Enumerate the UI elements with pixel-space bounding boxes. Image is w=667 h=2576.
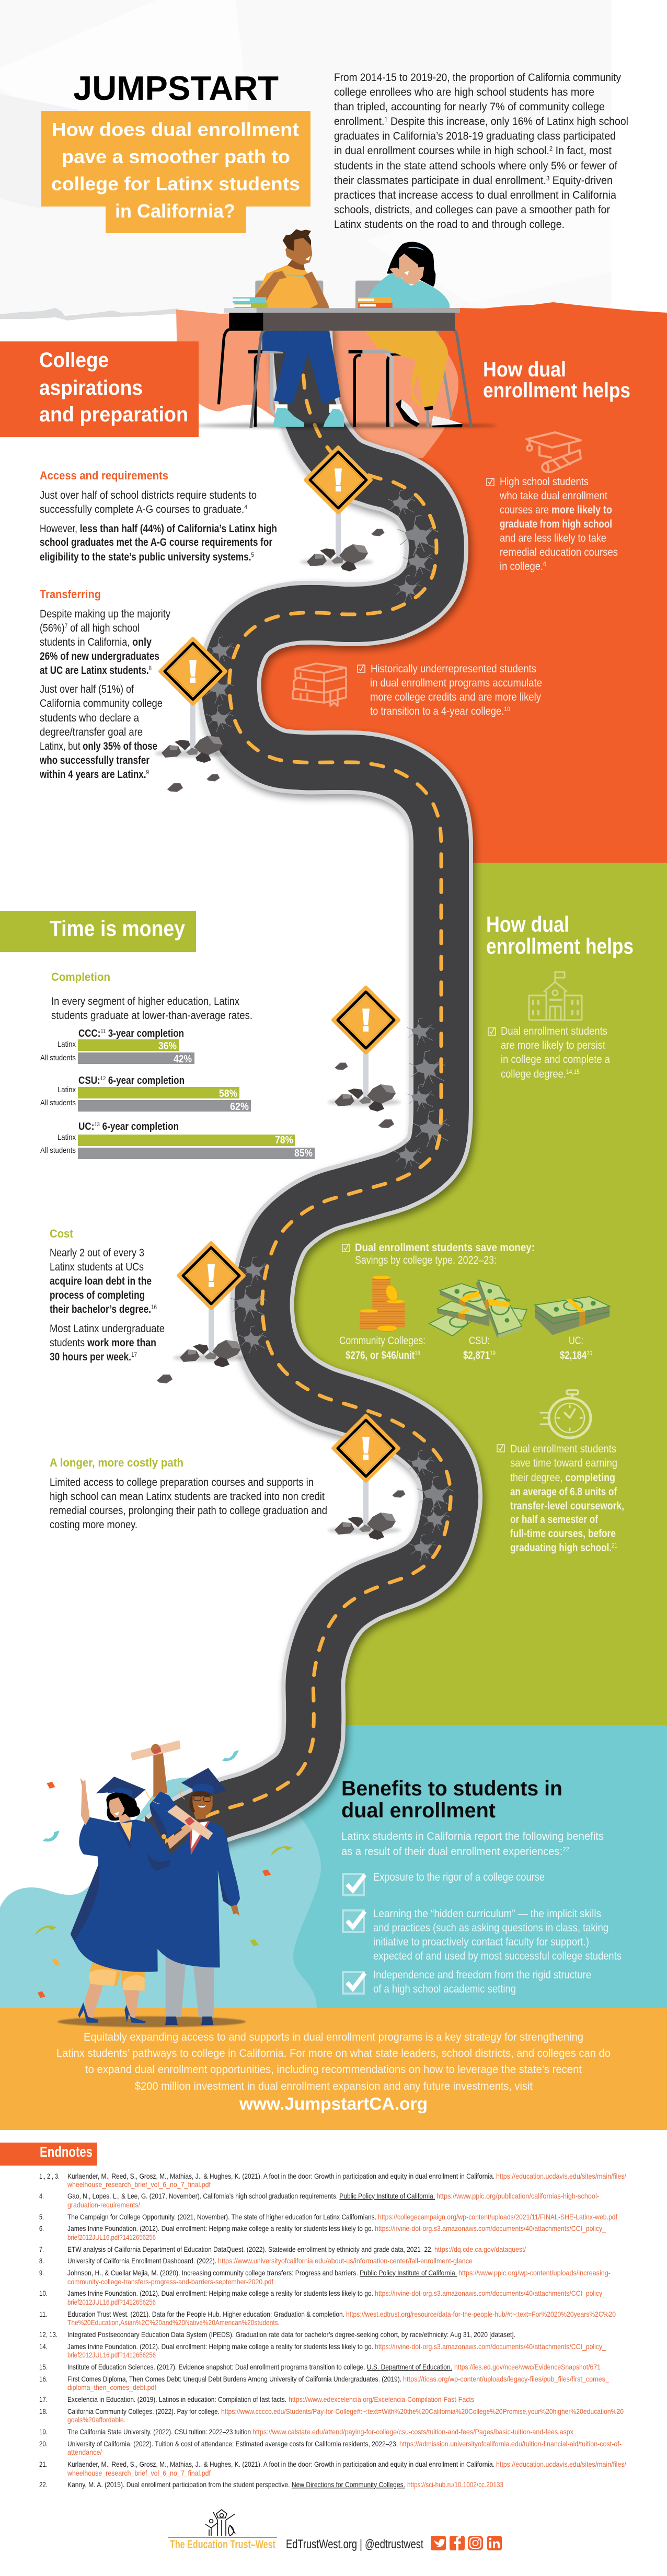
hazard sign 5 with rocks: [328, 1415, 401, 1540]
bars: UC: All students: [40, 1146, 76, 1155]
savings figures: $2,184: [560, 1349, 587, 1361]
text block: a longer, more costly path: high school can mean Latinx students are tracked into non credit: [50, 1491, 325, 1503]
bars: UC: 85%: [294, 1148, 313, 1159]
logo: The Education Trust-West: [168, 2510, 277, 2551]
text block: a longer, more costly path: A longer, more costly path: [50, 1456, 183, 1469]
section label: time is money: Time is money: [50, 916, 186, 941]
bars: CSU: All students: [40, 1098, 76, 1107]
section label: college aspirations and preparation: College: [39, 349, 109, 372]
endnotes list: brief2012JUL16.pdf?1412656256: [67, 2298, 156, 2306]
endnotes list: 17.: [39, 2395, 48, 2403]
text block: cost: students work more than: [50, 1337, 156, 1349]
text block: completion: [51, 970, 252, 1022]
bars: UC: 13: [94, 1121, 100, 1128]
bar chart: completion rates: [40, 1028, 315, 1159]
closing call to action: $200 million investment in dual enrollment expansion and any future investments, visit: [135, 2080, 533, 2092]
text block: completion: Completion: [51, 970, 110, 983]
endnotes list: https://www.universityofcalifornia.edu/about-us/information-center/fall-enrollment-glance: [218, 2257, 473, 2265]
intro paragraph: From 2014-15 to 2019-20, the proportion of California community: [334, 72, 621, 84]
intro paragraph: 1: [384, 116, 388, 123]
checklist: historically underrepresented students: Historically underrepresented students: [371, 663, 536, 675]
closing call to action: [56, 2031, 611, 2113]
benefit 3: [343, 1969, 591, 1995]
benefit 2: [343, 1908, 622, 1962]
benefit 3: of a high school academic setting: [373, 1983, 516, 1995]
text block: a longer, more costly path: [50, 1456, 327, 1531]
checklist: save money: Savings by college type, 2022–23:: [355, 1254, 497, 1266]
man raised arm and diploma: [131, 1740, 188, 1839]
bars: CCC: 36%: [158, 1040, 177, 1052]
endnotes list: 22.: [39, 2480, 48, 2489]
bars: CCC: [40, 1028, 194, 1065]
intro paragraph: college enrollees who are high school students has more: [334, 86, 594, 98]
endnotes list: graduation-requirements/: [67, 2201, 140, 2209]
benefit 2: initiative to proactively contact faculty for support.): [373, 1936, 589, 1948]
endnotes list: 14.: [39, 2342, 48, 2351]
endnotes list: https://ticas.org/wp-content/uploads/legacy-files/pub_files/first_comes_: [403, 2375, 609, 2383]
endnotes list: 20.: [39, 2440, 48, 2448]
text block: completion: In every segment of higher education, Latinx: [51, 995, 239, 1007]
endnotes list: https://irvine-dot-org.s3.amazonaws.com/documents/40/attachments/CCI_policy_: [375, 2289, 606, 2297]
bars: CSU: 58%: [219, 1088, 237, 1100]
checklist: save time: Dual enrollment students: [510, 1443, 616, 1455]
endnotes list: Excelencia in Education. (2019). Latinos in education: Compilation of fast facts.: [67, 2395, 286, 2403]
hazard sign 2 with rocks: [155, 638, 228, 763]
text block: transferring: degree/transfer goal are: [40, 726, 143, 738]
text block: transferring: of all high school: [67, 622, 140, 634]
checklist: save time: save time toward earning: [510, 1457, 617, 1469]
heading: how dual enrollment helps (orange): enrollment helps: [483, 379, 630, 402]
intro paragraph: Despite this increase, only 16% of Latinx high school: [388, 116, 628, 128]
endnotes list: 12, 13.: [39, 2330, 58, 2339]
endnotes list: wheelhouse_research_brief_vol_6_no_7_final.pdf: [67, 2180, 211, 2189]
endnotes list: brief2012JUL16.pdf?1412656256: [67, 2351, 156, 2359]
endnotes list: ETW analysis of California Department of Education DataQuest. (2022). Statewide enrollment by ethnicity and grade data, 2021–22.: [67, 2245, 433, 2253]
text block: access and requirements: 4: [244, 503, 247, 511]
icon: graduation cap and diploma: [526, 432, 581, 472]
endnotes list: 10.: [39, 2289, 48, 2297]
logo: The Education Trust-West: The Education Trust–West: [170, 2538, 275, 2551]
text block: a longer, more costly path: remedial courses, prolonging their path to college graduation and: [50, 1505, 327, 1517]
endnotes list: California Community Colleges. (2022). Pay for college.: [67, 2407, 220, 2415]
checklist: save time: full-time courses, before: [510, 1528, 616, 1540]
text block: access and requirements: successfully complete A-G courses to graduate.: [40, 503, 272, 516]
desk: [218, 308, 472, 428]
benefit 1: [343, 1871, 545, 1895]
checklist: historically underrepresented students: in dual enrollment programs accumulate: [370, 677, 542, 689]
panel background: teal benefits section: [220, 1723, 667, 2009]
checklist: high school students: remedial education courses: [500, 546, 618, 558]
endnotes list: 21.: [39, 2460, 48, 2468]
heading: how dual enrollment helps (green): enrollment helps: [486, 934, 634, 958]
text block: cost: Latinx students at UCs: [50, 1261, 144, 1273]
heading: benefits to students: Benefits to students in: [341, 1777, 562, 1800]
icon: stack of books: [293, 663, 346, 706]
text block: cost: Nearly 2 out of every 3: [50, 1247, 144, 1259]
text block: transferring: (56%): [40, 622, 69, 634]
panel background: orange right section: [229, 302, 667, 863]
endnotes list: https://west.edtrust.org/resource/data-for-the-people-hub/#:~:text=For%2020%20years%2C%20: [346, 2310, 616, 2318]
text block: transferring: within 4 years are Latinx.: [39, 769, 146, 781]
checklist: save time: or half a semester of: [510, 1514, 599, 1526]
endnotes label: [0, 2143, 97, 2166]
intro paragraph: Equity-driven: [549, 175, 613, 187]
text block: benefits intro: 22: [562, 1846, 569, 1853]
text block: transferring: Transferring: [40, 588, 101, 601]
bars: CSU: 12: [100, 1075, 106, 1082]
woman arm and diploma: [162, 1805, 213, 1849]
man gown: [157, 1821, 240, 1967]
checklist: high school students: [487, 476, 618, 573]
text block: cost: Most Latinx undergraduate: [50, 1323, 165, 1335]
text block: transferring: Despite making up the majority: [40, 608, 170, 620]
checklist: persist and complete: are more likely to persist: [501, 1039, 605, 1051]
endnotes list: 16.: [39, 2375, 48, 2383]
background: crumpled paper header: [0, 0, 667, 322]
text block: cost: Cost: [50, 1227, 74, 1240]
heading: benefits to students: dual enrollment: [341, 1799, 496, 1822]
endnotes list: https://admission.universityofcalifornia.edu/tuition-financial-aid/tuition-cost-of-: [399, 2440, 622, 2448]
intro paragraph: practices that increase access to dual enrollment in California: [334, 189, 616, 201]
heading: how dual enrollment helps (green): [486, 912, 634, 958]
checklist: persist and complete: [488, 1025, 610, 1080]
text block: transferring: students who declare a: [40, 712, 139, 724]
endnotes list: https://dq.cde.ca.gov/dataquest/: [434, 2245, 526, 2253]
checklist: save money: Dual enrollment students save money:: [355, 1242, 535, 1254]
savings figures: $2,871: [463, 1349, 490, 1361]
endnotes list: https://collegecampaign.org/wp-content/uploads/2021/11/FINAL-SHE-Latinx-web.pdf: [378, 2213, 617, 2221]
savings figures: UC:: [569, 1335, 583, 1347]
endnotes list: 4.: [39, 2192, 44, 2200]
savings figures: 18: [415, 1349, 420, 1357]
savings figures: 19: [490, 1349, 496, 1357]
text block: benefits intro: as a result of their dual enrollment experiences:: [341, 1846, 572, 1858]
icon: school building: [529, 972, 582, 1020]
icon: stick figures with grad cap: [205, 2510, 235, 2536]
intro paragraph: [334, 72, 628, 231]
title: JUMPSTART: [73, 69, 279, 107]
icon: cash stack: [535, 1297, 610, 1335]
endnotes label: Endnotes: [40, 2144, 93, 2160]
savings figures: Community Colleges:: [339, 1335, 426, 1347]
intro paragraph: Latinx students on the road to and through college.: [334, 219, 565, 231]
section label: college aspirations and preparation: [0, 341, 199, 437]
bars: CCC: 42%: [174, 1054, 192, 1065]
text block: access and requirements: However, less than half (44%) of California’s Latinx high: [40, 523, 277, 535]
endnotes list: The California State University. (2022). CSU tuition: 2022–23 tuition: [67, 2428, 251, 2436]
savings figures: $276, or $46/unit: [346, 1349, 415, 1361]
endnotes list: https://www.calstate.edu/attend/paying-for-college/csu-costs/tuition-and-fees/Pages/basic-tuition-and-fees.aspx: [252, 2428, 573, 2436]
subtitle callout box: How does dual enrollment: [52, 119, 299, 140]
checklist: historically underrepresented students: [358, 663, 542, 717]
subtitle callout box: in California?: [115, 200, 235, 222]
endnotes list: 1., 2., 3.: [39, 2172, 60, 2180]
endnotes list: Integrated Postsecondary Education Data System (IPEDS). Graduation rate data for bachelor’s degree-seeking cohort, by race/ethnicity: Aug 31, 2020 [dataset].: [67, 2330, 515, 2339]
benefit 2: expected of and used by most successful college students: [373, 1950, 622, 1962]
icon: coin stacks: [360, 1276, 405, 1332]
savings figures: [339, 1335, 592, 1361]
text block: access and requirements: Just over half of school districts require students to: [40, 489, 257, 501]
floor shadow: [58, 2016, 246, 2027]
checklist: historically underrepresented students: to transition to a 4-year college.: [370, 705, 523, 717]
endnotes list: community-college-transfers-progress-and-barriers-september-2020.pdf: [67, 2277, 273, 2286]
floor shadow under desk: [193, 423, 497, 428]
text block: cost: 30 hours per week.: [50, 1351, 131, 1363]
endnotes list: First Comes Diploma, Then Comes Debt: Unequal Debt Burdens Among University of California Undergraduates. (2019).: [67, 2375, 401, 2383]
hazard sign 4 with rocks: [173, 1243, 246, 1367]
endnotes list: [39, 2172, 626, 2489]
checklist: save time: an average of 6.8 units of: [510, 1486, 617, 1498]
closing call to action: www.JumpstartCA.org: [239, 2094, 428, 2113]
bars: UC: [40, 1121, 315, 1159]
panel background: green right section: [262, 863, 667, 1725]
endnotes list: Gao, N., Lopes, L., & Lee, G. (2017, November). California’s high school graduation requirements. Public Policy Institute of California.: [67, 2192, 435, 2200]
checklist: save time: their degree, completing: [510, 1472, 615, 1484]
woman arm and head: [80, 1777, 160, 1825]
endnotes list: 6.: [39, 2224, 44, 2232]
contact line: EdTrustWest.org | @edtrustwest: [286, 2537, 423, 2551]
section label: time is money: [0, 911, 196, 952]
endnotes list: Johnson, H., & Cuellar Mejia, M. (2020). Increasing community college transfers: Progress and barriers. Public Policy Institute of California.: [67, 2269, 457, 2277]
intro paragraph: 2: [549, 145, 553, 152]
text block: access and requirements: 5: [251, 551, 254, 558]
text block: cost: 17: [131, 1351, 137, 1358]
text block: benefits intro: [341, 1830, 604, 1858]
bars: CSU: CSU:: [78, 1075, 104, 1086]
text block: transferring: 7: [65, 622, 68, 629]
bars: CCC: All students: [40, 1054, 76, 1062]
text block: access and requirements: Access and requirements: [40, 469, 168, 482]
endnotes list: James Irvine Foundation. (2012). Dual enrollment: Helping make college a reality for students less likely to go.: [67, 2224, 373, 2232]
book stacks: [233, 297, 393, 308]
endnotes list: 9.: [39, 2269, 44, 2277]
endnotes list: https://irvine-dot-org.s3.amazonaws.com/documents/40/attachments/CCI_policy_: [375, 2224, 606, 2232]
checklist: historically underrepresented students: more college credits and are more likely: [370, 691, 541, 703]
text block: transferring: Just over half (51%) of: [40, 683, 134, 695]
endnotes list: 11.: [39, 2310, 48, 2318]
icon: social media: [431, 2536, 502, 2550]
savings figures: CSU:: [469, 1335, 490, 1347]
checklist: persist and complete: Dual enrollment students: [501, 1025, 607, 1037]
subtitle callout box: [41, 111, 310, 233]
endnotes list: 7.: [39, 2245, 44, 2253]
hazard sign 3 with rocks: [328, 987, 401, 1112]
endnotes list: Kurlaender, M., Reed, S., Grosz, M., Mathias, J., & Hughes, K. (2021). A foot in the door: Growth in participation and equity in dual enrollment in California.: [67, 2460, 494, 2468]
endnotes list: diploma_then_comes_debt.pdf: [67, 2383, 156, 2391]
closing call to action: to expand dual enrollment opportunities, including recommendations on how to leverage the state’s recent: [85, 2064, 582, 2076]
endnotes list: https://www.ppic.org/publication/californias-high-school-: [436, 2192, 599, 2200]
endnotes list: https://education.ucdavis.edu/sites/main/files/: [496, 2172, 626, 2180]
checklist: high school students: graduate from high school: [500, 518, 612, 530]
endnotes list: Education Trust West. (2021). Data for the People Hub. Higher education: Graduation & completion.: [67, 2310, 344, 2318]
bars: CSU: [40, 1075, 251, 1113]
checklist: save time: transfer-level coursework,: [510, 1500, 624, 1512]
bars: UC: UC:: [78, 1121, 97, 1132]
intro paragraph: schools, districts, and colleges can pave a smoother path for: [334, 204, 610, 216]
text block: a longer, more costly path: costing more money.: [50, 1519, 137, 1531]
text block: transferring: 9: [146, 769, 149, 776]
bars: UC: 6-year completion: [100, 1121, 179, 1132]
text block: transferring: [39, 588, 170, 781]
checklist: persist and complete: 14,15: [566, 1068, 580, 1075]
icon: stopwatch: [540, 1390, 591, 1438]
winding road: [149, 324, 454, 1870]
endnotes list: Kanny, M. A. (2015). Dual enrollment participation from the student perspective. New Directions for Community Colleges.: [67, 2480, 405, 2489]
endnotes list: https://www.edexcelencia.org/Excelencia-Compilation-Fast-Facts: [289, 2395, 474, 2403]
endnotes list: goals%20affordable.: [67, 2415, 125, 2424]
endnotes list: https://www.ppic.org/wp-content/uploads/increasing-: [458, 2269, 611, 2277]
checklist: high school students: who take dual enrollment: [499, 490, 607, 502]
illustration: students at desk: [218, 229, 472, 428]
subtitle callout box: pave a smoother path to: [62, 146, 290, 167]
bars: CSU: Latinx: [58, 1085, 76, 1094]
benefit checklist: [343, 1871, 622, 1995]
subtitle callout box: college for Latinx students: [51, 173, 300, 194]
bars: CCC: CCC:: [78, 1028, 105, 1039]
benefit 2: and practices (such as asking questions in class, taking: [373, 1922, 608, 1934]
icon: scattered cash bundles: [429, 1280, 527, 1338]
bars: UC: Latinx: [58, 1133, 76, 1142]
bars: CCC: Latinx: [58, 1040, 76, 1049]
closing call to action: Latinx students’ pathways to college in California. For more on what state leaders, school districts, and colleges can do: [56, 2047, 611, 2059]
text block: transferring: 26% of new undergraduates: [40, 650, 159, 662]
background: salmon blob behind desk: [176, 310, 458, 458]
background: light teal blob behind graduates: [0, 1778, 321, 2009]
intro paragraph: students in the state attend schools where only 5% or fewer of: [334, 160, 617, 172]
heading: how dual enrollment helps (green): How dual: [486, 912, 569, 936]
endnotes list: attendance/: [67, 2448, 102, 2456]
closing call to action: Equitably expanding access to and supports in dual enrollment programs is a key strategy for strengthening: [84, 2031, 583, 2043]
bars: CSU: 6-year completion: [106, 1075, 185, 1086]
text block: transferring: California community college: [40, 697, 163, 709]
endnotes list: Institute of Education Sciences. (2017). Evidence snapshot: Dual enrollment programs transition to college. U.S. Department of Education.: [67, 2363, 452, 2371]
boy: [255, 229, 344, 427]
endnotes list: 8.: [39, 2257, 44, 2265]
endnotes list: https://irvine-dot-org.s3.amazonaws.com/documents/40/attachments/CCI_policy_: [375, 2342, 606, 2351]
text block: benefits intro: Latinx students in California report the following benefits: [341, 1830, 604, 1842]
endnotes list: The%20Education,Asian%2C%20and%20Native%20American%20students.: [67, 2318, 280, 2327]
checklist: historically underrepresented students: 10: [504, 705, 510, 713]
checklist: save money: [342, 1242, 535, 1266]
intro paragraph: 3: [546, 175, 550, 182]
text block: a longer, more costly path: Limited access to college preparation courses and supports in: [50, 1476, 314, 1489]
checklist: persist and complete: in college and complete a: [501, 1054, 610, 1066]
checklist: high school students: High school students: [500, 476, 589, 488]
checklist: save time: [497, 1443, 624, 1554]
endnotes list: 18.: [39, 2407, 48, 2415]
text block: cost: their bachelor’s degree.: [50, 1303, 151, 1315]
checklist: high school students: 6: [543, 560, 546, 568]
text block: access and requirements: eligibility to the state’s public university systems.: [40, 551, 251, 563]
endnotes list: 5.: [39, 2213, 44, 2221]
text block: transferring: who successfully transfer: [39, 754, 150, 766]
road centre dashes: [149, 324, 451, 1867]
intro paragraph: their classmates participate in dual enrollment.: [334, 175, 560, 187]
text block: cost: process of completing: [50, 1289, 145, 1301]
bars: CSU: 62%: [230, 1101, 249, 1113]
text block: cost: [50, 1227, 165, 1363]
checklist: persist and complete: college degree.: [501, 1068, 576, 1080]
endnotes list: University of California Enrollment Dashboard. (2022).: [67, 2257, 216, 2265]
bars: CCC: 3-year completion: [106, 1028, 184, 1039]
bars: UC: 78%: [275, 1135, 293, 1146]
endnotes list: brief2012JUL16.pdf?1412656256: [67, 2233, 156, 2241]
road gap between gowns: [145, 1816, 166, 1916]
checklist: high school students: courses are more likely to: [500, 504, 612, 516]
checklist: high school students: and are less likely to take: [500, 532, 606, 544]
confetti: [34, 1750, 293, 1998]
benefit 3: Independence and freedom from the rigid structure: [373, 1969, 591, 1981]
text block: completion: students graduate at lower-than-average rates.: [51, 1010, 252, 1022]
savings figures: 20: [586, 1349, 592, 1357]
section label: college aspirations and preparation: aspirations: [39, 376, 143, 399]
endnotes list: James Irvine Foundation. (2012). Dual enrollment: Helping make college a reality for students less likely to go.: [67, 2342, 373, 2351]
endnotes list: University of California. (2022). Tuition & cost of attendance: Estimated average costs for California residents, 2022–23.: [67, 2440, 398, 2448]
heading: how dual enrollment helps (orange): [483, 358, 630, 402]
woman gown: [71, 1817, 171, 1972]
intro paragraph: graduates in California’s 2018-19 graduating class participated: [334, 130, 616, 142]
endnotes list: wheelhouse_research_brief_vol_6_no_7_final.pdf: [67, 2469, 211, 2477]
endnotes list: https://education.ucdavis.edu/sites/main/files/: [496, 2460, 626, 2468]
chairs: [248, 281, 451, 427]
intro paragraph: than tripled, accounting for nearly 7% of community college: [334, 101, 605, 113]
section label: college aspirations and preparation: and preparation: [39, 403, 188, 426]
bars: CCC: 11: [100, 1028, 106, 1035]
text block: cost: 16: [151, 1303, 157, 1311]
endnotes list: https://sci-hub.ru/10.1002/cc.20133: [407, 2480, 503, 2489]
endnotes list: 19.: [39, 2428, 48, 2436]
text block: transferring: students in California, only: [40, 636, 152, 648]
road cracks: [203, 490, 454, 1562]
panel background: yellow closing band: [0, 2008, 667, 2130]
text block: cost: acquire loan debt in the: [50, 1275, 152, 1287]
checklist: save time: 21: [612, 1542, 617, 1549]
endnotes list: 15.: [39, 2363, 48, 2371]
heading: benefits to students: [341, 1777, 562, 1822]
illustration: graduates: [34, 1740, 293, 2027]
man pants and shoes: [165, 1955, 214, 2025]
woman skirt and legs: [78, 1961, 146, 2023]
endnotes list: James Irvine Foundation. (2012). Dual enrollment: Helping make college a reality for students less likely to go.: [67, 2289, 373, 2297]
text block: access and requirements: [40, 469, 277, 563]
hazard sign 1 with rocks: [300, 447, 373, 571]
intro paragraph: enrollment.: [334, 116, 388, 128]
benefit 2: Learning the “hidden curriculum” — the implicit skills: [373, 1908, 601, 1920]
intro paragraph: In fact, most: [553, 145, 612, 157]
checklist: high school students: in college.: [500, 560, 549, 573]
endnotes list: The Campaign for College Opportunity. (2021, November). The state of higher education for Latinx Californians.: [67, 2213, 376, 2221]
endnotes list: https://ies.ed.gov/ncee/wwc/EvidenceSnapshot/671: [454, 2363, 601, 2371]
man head: [180, 1768, 226, 1819]
benefit 1: Exposure to the rigor of a college course: [373, 1871, 545, 1883]
heading: how dual enrollment helps (orange): How dual: [483, 358, 566, 381]
text block: transferring: at UC are Latinx students.: [40, 665, 149, 677]
text block: transferring: 8: [149, 665, 152, 672]
intro paragraph: in dual enrollment courses while in high school.: [334, 145, 564, 157]
text block: access and requirements: school graduates met the A-G course requirements for: [40, 536, 272, 548]
loose rocks: [157, 529, 405, 1497]
girl: [365, 242, 463, 427]
endnotes list: Kurlaender, M., Reed, S., Grosz, M., Mathias, J., & Hughes, K. (2021). A foot in the door: Growth in participation and equity in dual enrollment in California.: [67, 2172, 494, 2180]
checklist: save time: graduating high school.: [510, 1542, 612, 1554]
text block: transferring: Latinx, but only 35% of those: [40, 740, 157, 752]
